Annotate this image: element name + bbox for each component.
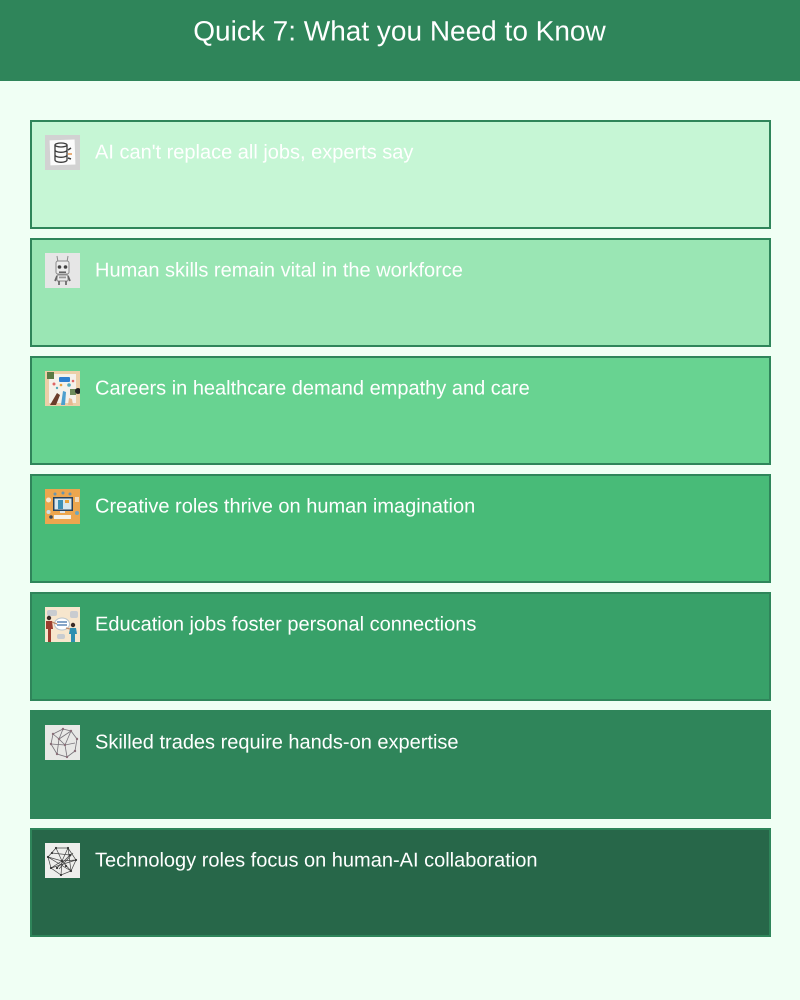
card 5: Education: [30, 592, 771, 701]
icon: line network sphere: [45, 725, 80, 760]
card text: Skilled trades require hands-on expertise: [95, 731, 459, 753]
icon: database checklist: [45, 135, 80, 170]
card 4: Creative roles: [30, 474, 771, 583]
card text: Creative roles thrive on human imagination: [95, 495, 475, 517]
card text: Human skills remain vital in the workforce: [95, 259, 463, 281]
card 1: AI can't replace all jobs: [30, 120, 771, 229]
title: Quick 7: What you Need to Know: [193, 16, 606, 46]
header band: [0, 0, 800, 81]
icon: two people talking: [45, 607, 80, 642]
icon: computer on orange: [45, 489, 80, 524]
card 6: Skilled trades: [30, 710, 771, 819]
card text: Careers in healthcare demand empathy and care: [95, 377, 530, 399]
icon: dense network: [45, 843, 80, 878]
card 2: Human skills: [30, 238, 771, 347]
card text: AI can't replace all jobs, experts say: [95, 141, 413, 163]
card text: Education jobs foster personal connections: [95, 613, 476, 635]
icon: robot: [45, 253, 80, 288]
card text: Technology roles focus on human-AI collaboration: [95, 849, 537, 871]
card 3: Healthcare: [30, 356, 771, 465]
card 7: Technology roles: [30, 828, 771, 937]
icon: hands over desk: [45, 371, 80, 406]
